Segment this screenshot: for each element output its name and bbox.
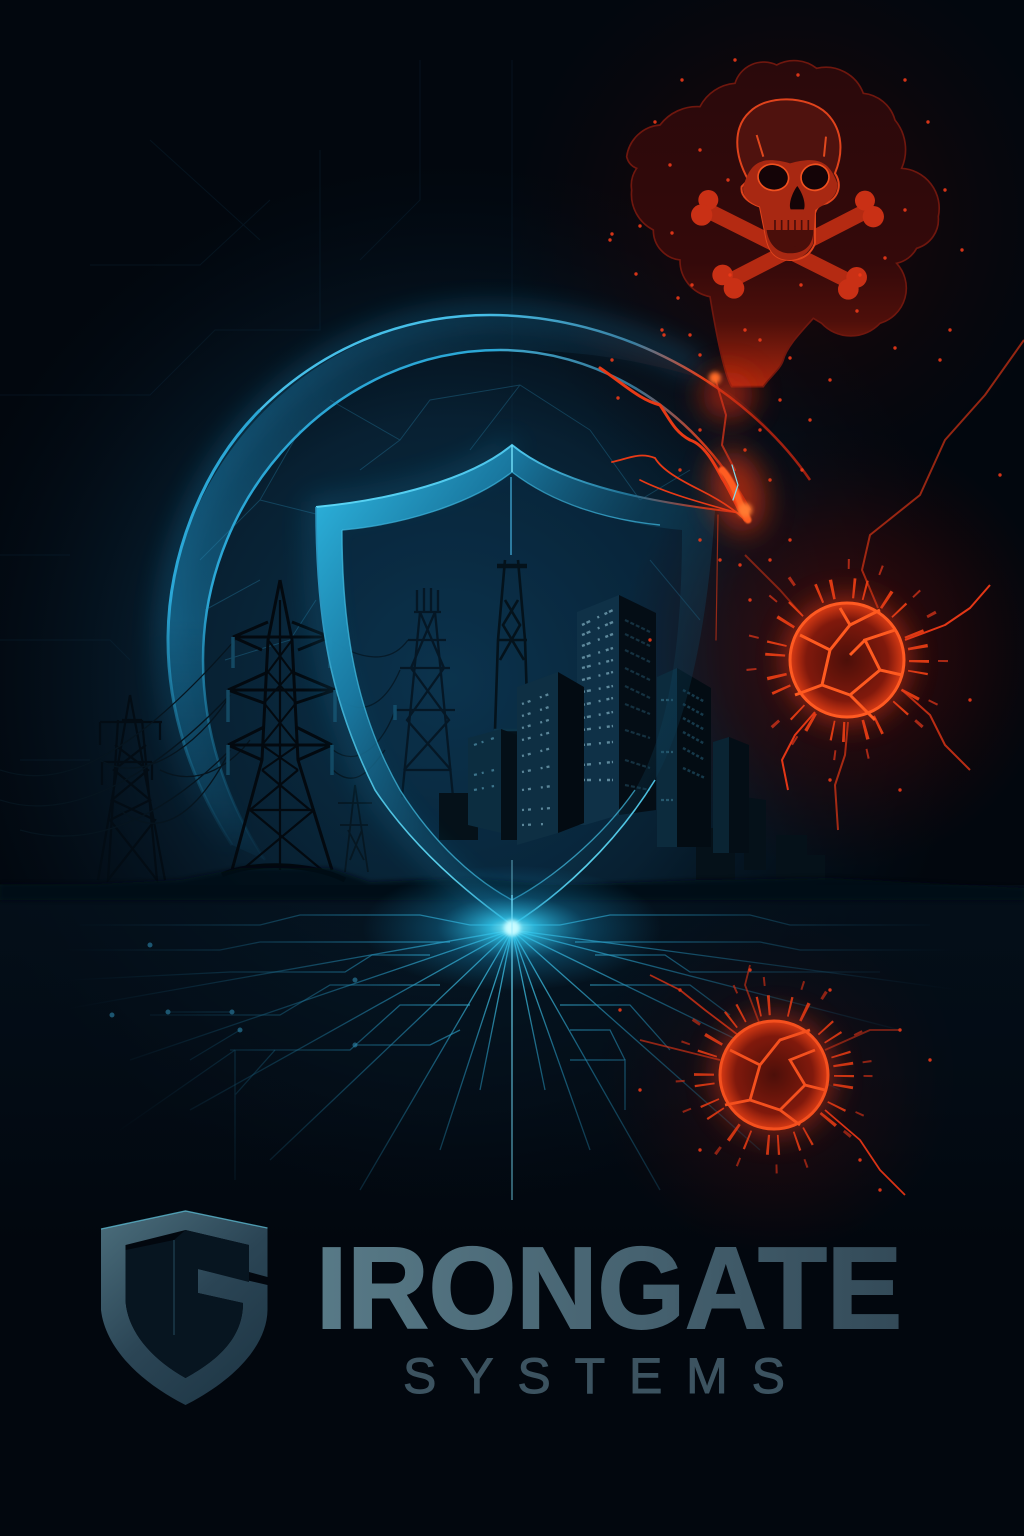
- wordmark IRONGATE: IRONGATE: [316, 1223, 902, 1353]
- lightning cracks: [600, 368, 748, 640]
- shield outer edge: [316, 445, 735, 512]
- horizon ground silhouette: [0, 868, 1024, 900]
- low blocks: [439, 793, 825, 880]
- virus upper: [745, 340, 1024, 830]
- small distant pylon: [338, 785, 372, 872]
- logo shield: [101, 1211, 268, 1405]
- energy ring: [168, 315, 810, 860]
- virus cracks upper: [795, 608, 902, 720]
- left pylon: [98, 695, 165, 880]
- mid building: [517, 672, 584, 845]
- Irongate logo: [101, 1211, 902, 1405]
- toxic cloud with skull and crossbones: [627, 61, 939, 387]
- main shield: [316, 445, 735, 930]
- ring band: [168, 315, 810, 860]
- shield glow: [316, 445, 512, 925]
- impact zone on ring: [600, 368, 774, 640]
- ring web cracks: [200, 385, 700, 660]
- virus cracks lower: [725, 1030, 825, 1125]
- ring inner edge: [500, 350, 750, 510]
- floor nodes: [112, 945, 355, 1045]
- faint background circuit traces: [0, 60, 512, 760]
- radial spikes lower: [704, 1005, 844, 1145]
- shield band: [316, 445, 715, 925]
- main pylon: [222, 580, 345, 880]
- radial spikes upper: [775, 588, 919, 732]
- virus glow upper: [785, 598, 909, 722]
- tendrils upper: [745, 340, 1024, 830]
- red embers: [610, 60, 1000, 1190]
- shield interior tint: [342, 472, 682, 900]
- building: far right: [713, 737, 749, 853]
- central light burst: [362, 860, 662, 1200]
- virus sphere lower: [720, 1021, 828, 1129]
- virus sphere upper: [790, 603, 904, 717]
- wordmark SYSTEMS: SYSTEMS: [403, 1348, 785, 1404]
- cloud body: [627, 61, 939, 387]
- virus glow lower: [714, 1015, 834, 1135]
- antenna mast: [488, 477, 528, 800]
- ring glow: [168, 315, 700, 845]
- crossbones: [691, 190, 884, 300]
- tendrils lower: [640, 965, 905, 1195]
- virus lower: [640, 965, 905, 1195]
- city skyline: [439, 595, 825, 880]
- building: left low: [468, 729, 517, 840]
- circuit floor: [0, 885, 1024, 1245]
- communications tower: [395, 588, 455, 797]
- tallest building: [577, 595, 656, 825]
- ring outer edge: [168, 410, 260, 845]
- power lines: [0, 640, 408, 836]
- shield inner edge: [342, 472, 660, 530]
- impact hot spots: [738, 503, 752, 517]
- building: right of tallest: [657, 668, 711, 847]
- floor circuit lines: [60, 915, 960, 1200]
- impact glow: [702, 445, 774, 539]
- skull: [737, 99, 840, 260]
